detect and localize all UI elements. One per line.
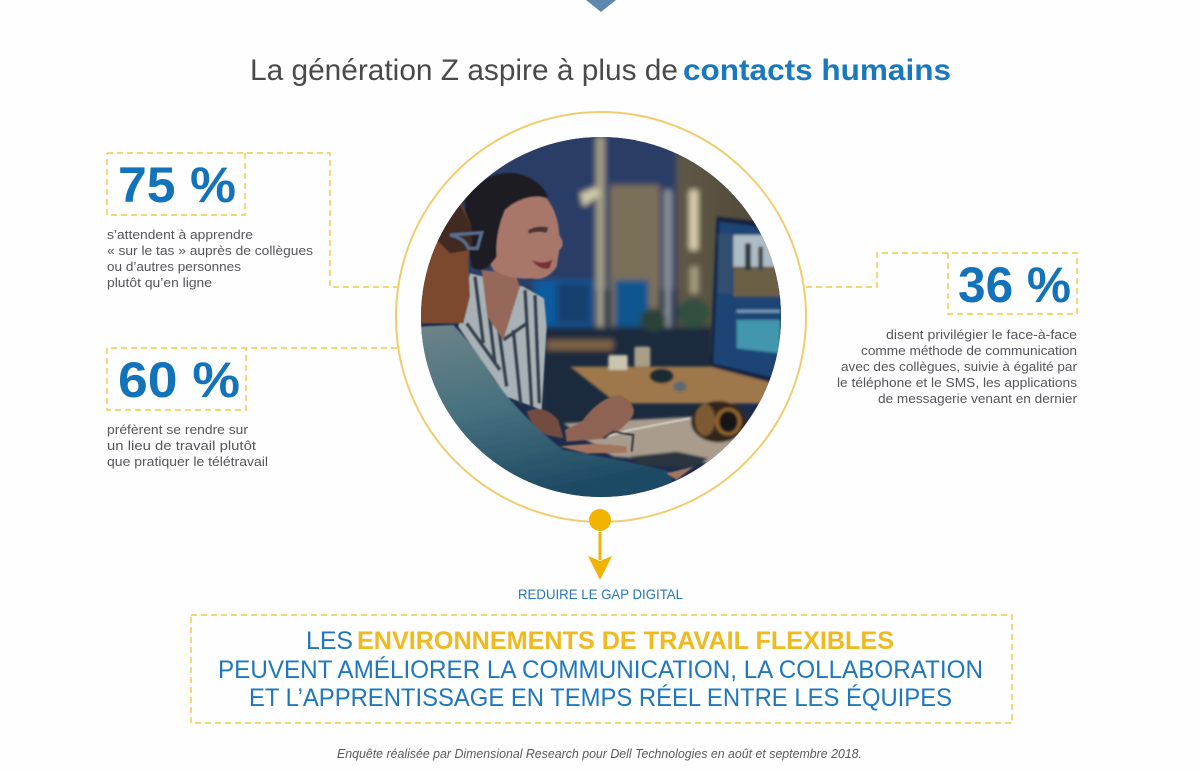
text: 36 % description: avec des collègues, suivie à égalité par [841,359,1078,374]
number: 36 %: 36 % [958,257,1071,313]
number: 75 %: 75 % [118,157,236,213]
text: 75 % description: plutôt qu’en ligne [107,275,212,290]
text: call to action: ENVIRONNEMENTS DE TRAVAIL FLEXIBLES [357,627,894,655]
neck [482,270,520,340]
text: call to action: PEUVENT AMÉLIORER LA COMMUNICATION, LA COLLABORATION [218,655,983,684]
text: 60 % description: préfèrent se rendre sur [107,422,249,437]
wires [607,418,690,437]
text: 75 % description [107,227,314,290]
hands [527,409,563,438]
footnote: Enquête réalisée par Dimensional Research pour Dell Technologies en août et septembre 2018. [337,747,862,761]
text: 75 % description: ou d’autres personnes [107,259,242,274]
connector and box: 75 % [107,153,397,287]
panel: 75 % statistic [107,153,397,290]
text: 36 % description: disent privilégier le face-à-face [886,327,1077,342]
man's arm and shoulder [420,325,677,503]
text: 60 % description: un lieu de travail plutôt [107,438,256,453]
text: call to action: ET L’APPRENTISSAGE EN TEMPS RÉEL ENTRE LES ÉQUIPES [249,683,952,712]
text: 60 % description: que pratiquer le télétravail [107,454,268,469]
headphones [691,401,746,442]
text: 36 % description [837,327,1078,406]
text: 60 % description [107,422,268,469]
connector and box: 60 % [107,348,397,410]
number: 60 %: 60 % [118,352,240,408]
text: 36 % description: comme méthode de communication [861,343,1077,358]
label: réduire le gap digital: REDUIRE LE GAP DIGITAL [518,586,683,602]
arrow: dot and downward arrow [588,509,612,580]
panel: 60 % statistic [107,348,397,469]
text: call to action: LES [306,627,353,655]
photo: two colleagues at a computer [421,137,781,497]
woman's face [485,196,563,279]
front table [563,415,747,463]
title: La génération Z aspire à plus de [250,54,678,87]
panel: 36 % statistic [806,253,1078,406]
text: 36 % description: de messagerie venant en dernier [878,391,1078,406]
man's hair and beard [420,200,472,323]
icon: top marker [586,0,616,12]
text: call to action [218,627,983,712]
shirt [458,273,547,410]
title [250,54,951,87]
text: 75 % description: s’attendent à apprendre [107,227,253,242]
man's glasses [450,233,482,248]
ring around photo [396,112,806,522]
text: 36 % description: le téléphone et le SMS, les applications [837,375,1078,390]
woman's hair [465,173,548,270]
title: contacts humains [683,54,951,87]
panel: call to action [191,615,1012,723]
monitor [710,217,787,387]
desk [570,367,773,403]
text: 75 % description: « sur le tas » auprès de collègues [107,243,314,258]
connector and box: 36 % [806,253,1077,314]
